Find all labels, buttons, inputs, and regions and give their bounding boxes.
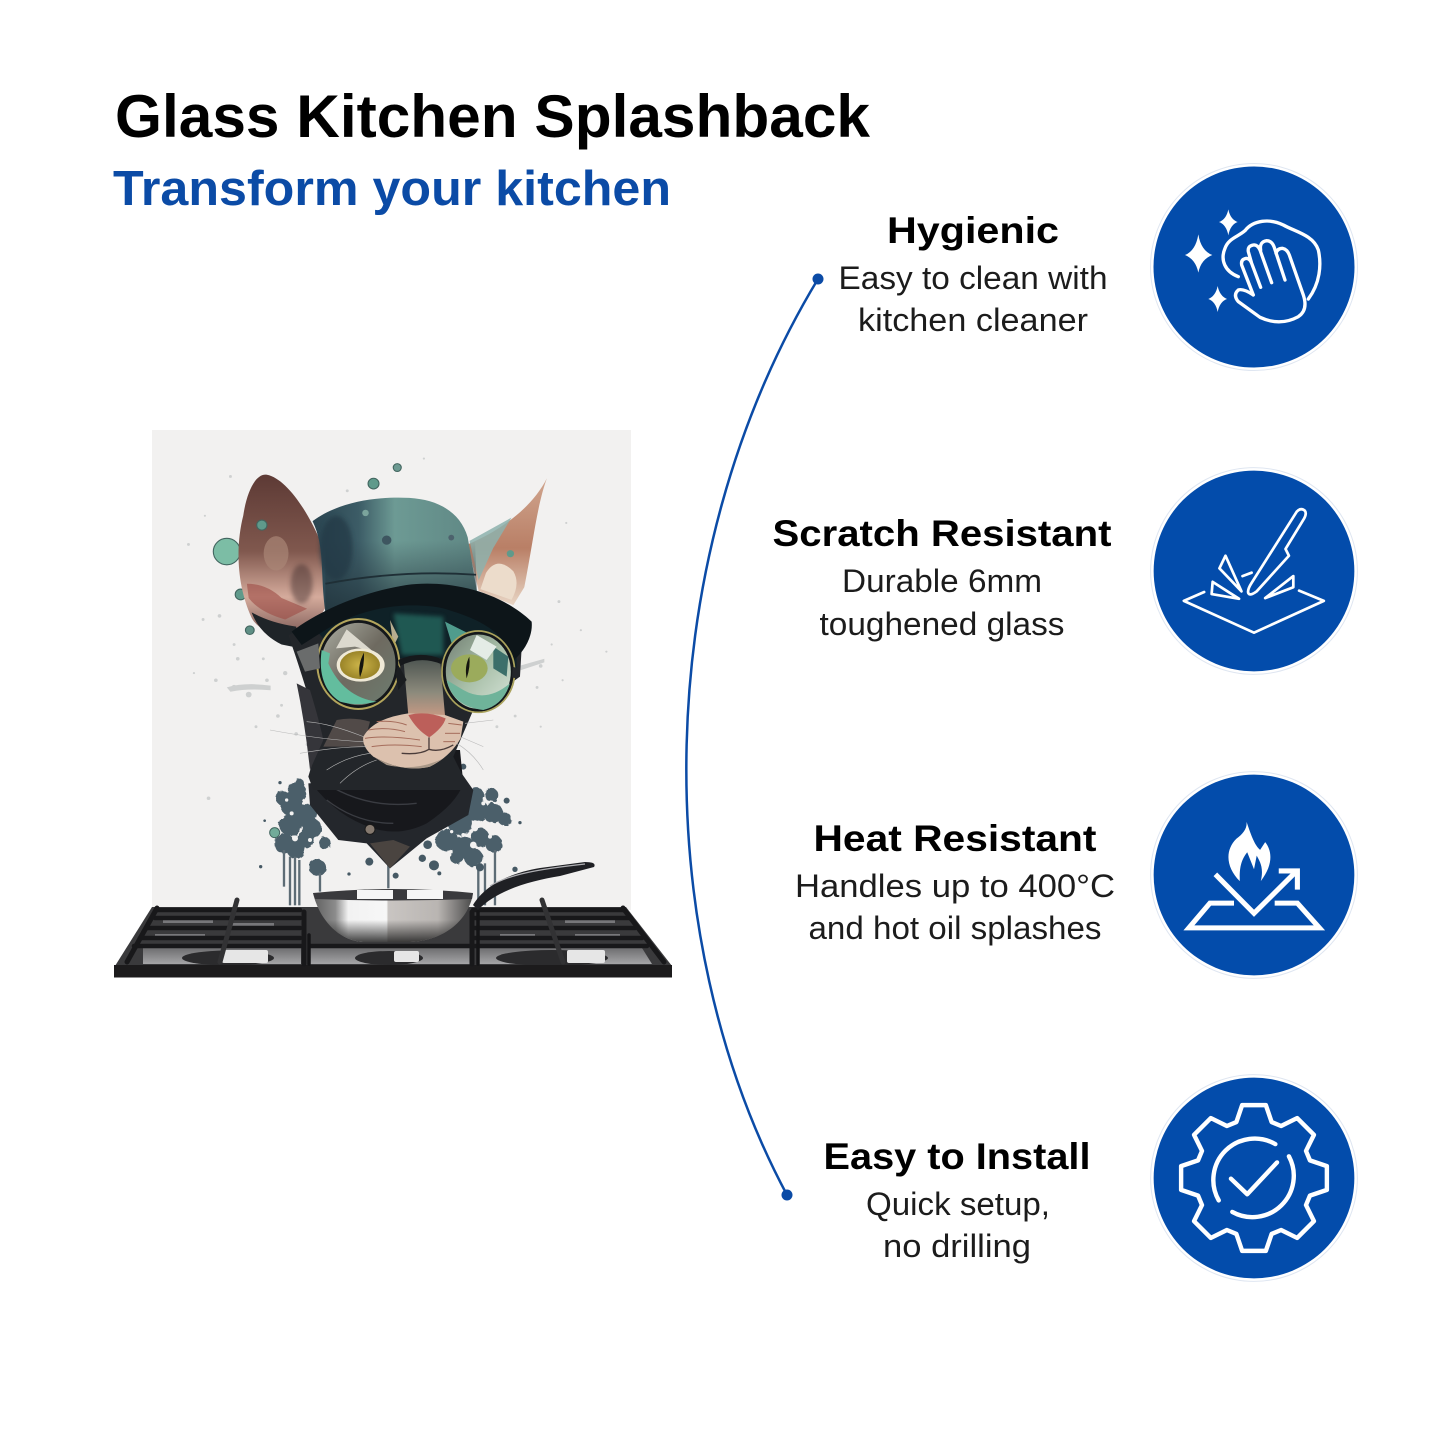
hat brim	[292, 584, 532, 662]
muzzle stripes	[365, 721, 462, 747]
description line 1: Handles up to 400°C	[795, 868, 1115, 904]
burner wells	[143, 948, 301, 964]
green droplet	[270, 828, 280, 838]
scarf	[312, 750, 463, 832]
feature: heat resistant	[795, 818, 1115, 946]
description line 2: and hot oil splashes	[808, 910, 1102, 946]
description line 2: kitchen cleaner	[858, 302, 1088, 338]
connector arc with end dots	[686, 274, 824, 1200]
left eye	[337, 648, 385, 682]
left ear	[239, 475, 329, 644]
description line 1: Durable 6mm	[842, 563, 1042, 599]
whiskers	[270, 720, 493, 783]
nose	[408, 713, 446, 737]
pan rim	[313, 889, 473, 900]
hob surface	[115, 907, 672, 966]
forehead	[313, 597, 517, 670]
muzzle and cheeks	[363, 713, 463, 769]
pan rim highlights	[357, 890, 393, 899]
scarf, collar and paint splatter	[259, 750, 522, 905]
cat head top: ears, hat and bubbles	[187, 458, 607, 800]
heading: Hygienic	[887, 210, 1059, 251]
cast iron grates	[127, 900, 664, 964]
feature: easy to install	[824, 1136, 1090, 1264]
icon: flame over glass with arrow	[1151, 772, 1357, 978]
frying pan	[313, 862, 595, 942]
drips	[284, 850, 495, 905]
pan handle	[473, 862, 595, 910]
nose bridge	[403, 658, 445, 715]
product image: splashback with cat artwork above a gas hob	[114, 430, 672, 978]
head and neck silhouette	[288, 590, 523, 790]
icon: gear with check mark	[1151, 1075, 1357, 1281]
burners	[182, 950, 608, 966]
mouth	[402, 737, 453, 754]
icon: knife scratching glass	[1151, 468, 1357, 674]
collar button	[365, 824, 375, 834]
cat face with glasses	[270, 584, 532, 790]
splashback panel	[152, 430, 631, 910]
accent bubbles	[213, 464, 401, 634]
dark spots	[259, 764, 522, 879]
heading: Easy to Install	[824, 1136, 1090, 1177]
description line 1: Quick setup,	[866, 1186, 1050, 1222]
description line 2: no drilling	[883, 1228, 1031, 1264]
pan body	[313, 893, 473, 942]
grey paint speckle	[187, 458, 607, 800]
icon: hand wiping with sparkles	[1150, 164, 1358, 370]
description line 1: Easy to clean with	[838, 260, 1108, 296]
gas hob	[114, 900, 672, 978]
right eye	[451, 654, 488, 682]
feature: scratch resistant	[772, 513, 1112, 642]
glasses bridge and hinges	[297, 643, 517, 690]
feature: hygienic	[838, 210, 1108, 338]
heading: Heat Resistant	[814, 818, 1096, 859]
heading: Scratch Resistant	[772, 513, 1112, 554]
left lens	[317, 619, 399, 709]
hob front edge	[114, 965, 672, 978]
splatter blobs	[274, 779, 512, 876]
white flecks in splatter	[285, 798, 492, 848]
right lens	[442, 631, 515, 712]
hat crown	[313, 498, 477, 612]
upper grate highlights	[155, 920, 620, 937]
subtitle: Transform your kitchen	[113, 162, 671, 216]
description line 2: toughened glass	[820, 606, 1064, 642]
title: Glass Kitchen Splashback	[115, 83, 871, 150]
jacket collar	[308, 773, 473, 868]
right ear	[468, 478, 547, 605]
